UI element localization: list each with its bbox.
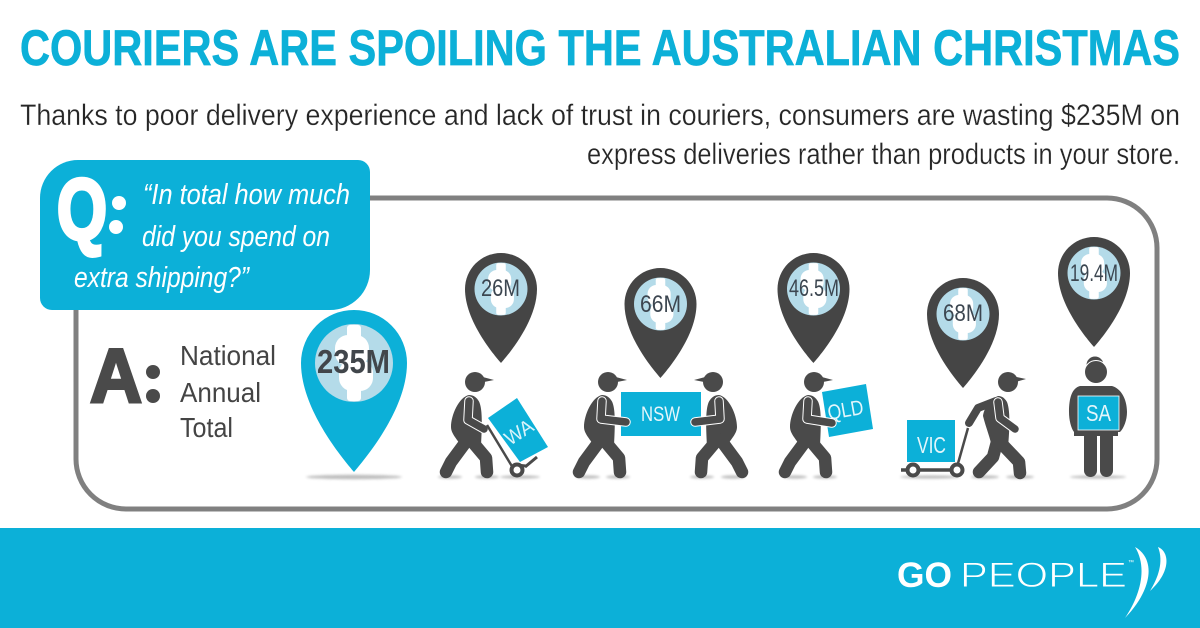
pin: WA 26M (465, 253, 537, 363)
answer text: Annual (180, 377, 261, 408)
pin: WA 26M: 26M (481, 275, 520, 302)
logo: Go People: PEOPLE (960, 556, 1127, 595)
courier pulling cart: VIC (901, 372, 1026, 476)
question text: “In total how much (143, 179, 350, 211)
question text: extra shipping?” (74, 262, 250, 294)
footer band (0, 528, 1200, 628)
pin: QLD 46.5M (778, 253, 850, 363)
box: WA: WA (501, 415, 538, 450)
answer text (180, 340, 276, 443)
box: NSW: NSW (641, 403, 680, 426)
pin: NSW 66M: 66M (640, 291, 681, 318)
pin: national total 235M: 235M (317, 343, 390, 380)
panel: rounded chart frame (76, 198, 1157, 509)
courier with hand truck: WA (446, 372, 548, 476)
logo: Go People: GO (897, 556, 952, 595)
box: VIC: VIC (917, 432, 946, 458)
ground shadows (306, 475, 1126, 479)
panel: question bubble (40, 160, 370, 310)
pin: national total 235M (301, 310, 407, 472)
pin: SA 19.4M: 19.4M (1070, 260, 1118, 287)
answer text: National (180, 340, 276, 371)
question text (74, 179, 350, 294)
answer label: A (90, 334, 142, 419)
box: SA: SA (1086, 400, 1112, 426)
logo swooshes (1125, 547, 1149, 618)
couriers carrying box: NSW (579, 372, 742, 472)
courier carrying box: QLD (785, 372, 873, 472)
pin: SA 19.4M (1058, 237, 1130, 347)
logo: Go People: ™ (1128, 559, 1134, 566)
pin: QLD 46.5M: 46.5M (789, 275, 839, 302)
pin: VIC 68M (927, 278, 999, 388)
answer text: Total (180, 412, 233, 443)
logo: Go People (897, 547, 1167, 618)
box: QLD: QLD (826, 396, 865, 425)
box: NSW (621, 392, 701, 436)
pin: NSW 66M (624, 268, 696, 378)
question text: did you spend on (142, 221, 330, 253)
subtitle (20, 99, 1180, 171)
question mark label: Q (57, 162, 107, 258)
pin: VIC 68M: 68M (943, 300, 983, 327)
courier front view: SA (1069, 356, 1127, 477)
